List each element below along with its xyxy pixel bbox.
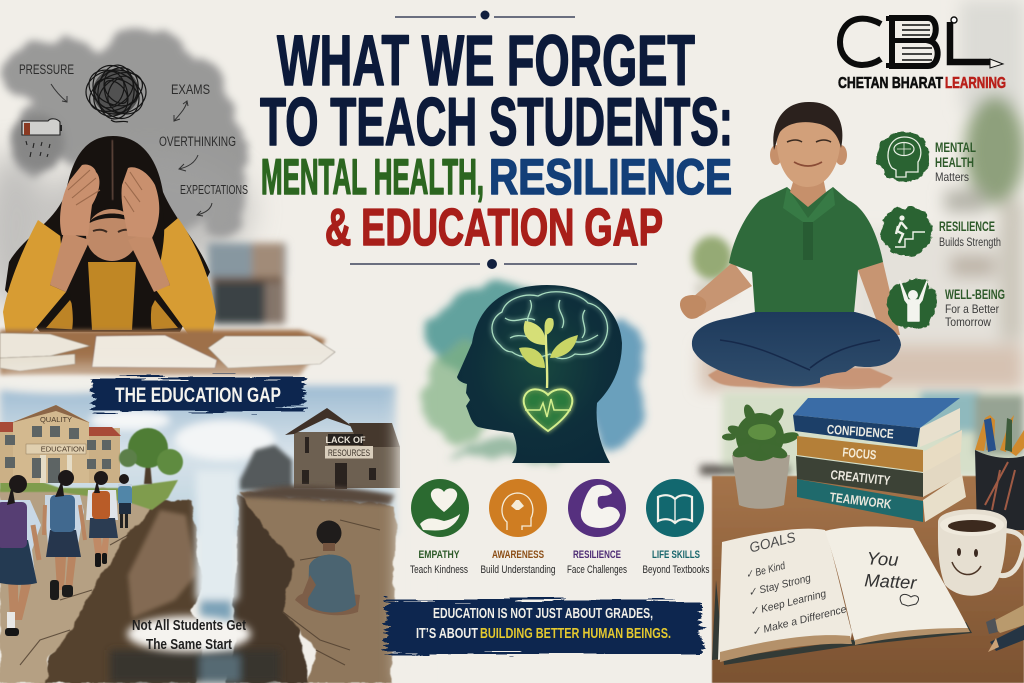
book stack xyxy=(793,398,966,522)
banner: the education gap: THE EDUCATION GAP xyxy=(115,384,281,407)
notebook goals list: GOALS xyxy=(748,528,798,556)
boy xyxy=(680,102,901,389)
book: teamwork xyxy=(797,474,966,522)
skill: awareness xyxy=(480,479,556,576)
brain outline xyxy=(492,292,608,359)
soft edge on paper xyxy=(0,368,418,683)
shirt xyxy=(729,187,883,313)
skill: empathy: EMPATHY xyxy=(418,549,460,561)
desk top xyxy=(712,476,1024,683)
icon: resilience xyxy=(882,206,932,256)
book: confidence: CONFIDENCE xyxy=(826,422,895,441)
notebook goals list: ✓ Be Kind xyxy=(745,560,787,581)
student 2 xyxy=(44,470,85,600)
text: well-being xyxy=(945,287,1005,329)
top divider xyxy=(395,10,575,20)
ground cracks xyxy=(20,520,380,665)
notebook you matter note xyxy=(864,548,919,593)
banner highlight: BUILDING BETTER HUMAN BEINGS. xyxy=(480,625,671,642)
sweater upper arms xyxy=(3,220,66,335)
banner: the education gap xyxy=(92,378,304,411)
panel: growing mind xyxy=(422,285,645,463)
caption: not all students: Not All Students Get xyxy=(132,617,246,634)
panel: desk scene xyxy=(700,392,1024,683)
smiley mug xyxy=(938,509,1024,596)
student 4 xyxy=(118,474,132,528)
room background xyxy=(700,0,1024,390)
student 1 xyxy=(0,475,41,636)
students walking to school xyxy=(0,470,132,636)
title: & EDUCATION GAP xyxy=(325,199,663,257)
scribble icon xyxy=(81,57,151,127)
book: creativity xyxy=(796,452,961,497)
watercolor wash xyxy=(422,285,645,462)
caption: not all students xyxy=(127,616,251,653)
icon: well-being xyxy=(887,278,937,328)
text: resilience builds strength: RESILIENCE xyxy=(939,219,995,234)
sign: resources xyxy=(325,446,373,459)
skill: awareness: AWARENESS xyxy=(492,549,544,561)
text: mental health matters xyxy=(935,139,976,184)
banner line 2: IT’S ABOUT xyxy=(416,625,478,642)
jeans xyxy=(692,312,901,386)
book: teamwork: TEAMWORK xyxy=(829,489,893,512)
ruined house xyxy=(240,408,400,505)
skill: awareness: Build Understanding xyxy=(480,564,556,576)
notebook goals list xyxy=(730,521,848,638)
pens xyxy=(986,605,1024,652)
tree xyxy=(119,428,183,484)
bookshelf behind student xyxy=(208,243,286,324)
arms xyxy=(692,262,752,316)
book: confidence xyxy=(793,398,960,447)
row: life skill icons xyxy=(410,479,710,576)
table xyxy=(0,330,326,375)
text: mental health matters: HEALTH xyxy=(935,154,974,170)
chasm water and mist xyxy=(110,470,280,683)
forearms skin xyxy=(50,232,90,292)
notebook goals list: ✓ Make a Difference xyxy=(751,603,848,638)
lower title divider xyxy=(350,259,637,269)
icon: mental health xyxy=(877,131,929,183)
skill: resilience: Face Challenges xyxy=(567,564,627,576)
logo mark xyxy=(840,16,1003,68)
left ground xyxy=(0,490,165,683)
head silhouette xyxy=(457,285,622,463)
open books on table xyxy=(0,333,335,371)
label: pressure: PRESSURE xyxy=(19,62,74,77)
panel: stress cloud and student xyxy=(0,27,335,375)
label: expectations: EXPECTATIONS xyxy=(180,182,248,197)
text: resilience builds strength xyxy=(939,219,1001,249)
title: RESILIENCE xyxy=(489,149,732,205)
skill: resilience: RESILIENCE xyxy=(573,549,621,561)
good school xyxy=(0,405,121,483)
text: mental health matters: MENTAL xyxy=(935,139,976,155)
grass xyxy=(0,478,178,510)
skill: empathy: Teach Kindness xyxy=(410,564,468,576)
book: focus: FOCUS xyxy=(842,445,877,462)
skill: life skills: LIFE SKILLS xyxy=(652,549,700,561)
hair front strands xyxy=(60,200,164,330)
arrows xyxy=(51,84,212,216)
panel: meditating boy room xyxy=(680,0,1024,390)
text: mental health matters: Matters xyxy=(935,170,969,184)
face xyxy=(86,209,138,261)
notebook you matter note: You xyxy=(866,548,899,570)
notebook goals list: ✓ Stay Strong xyxy=(747,572,812,599)
blurred window xyxy=(700,392,1024,477)
logo: CBL xyxy=(838,16,1006,92)
good school: QUALITY xyxy=(40,415,72,424)
left cliff xyxy=(40,500,205,683)
student with head in hands xyxy=(3,136,216,342)
title: WHAT WE FORGET xyxy=(277,22,695,101)
skill: life skills: Beyond Textbooks xyxy=(642,564,710,576)
heart pulse xyxy=(524,389,572,431)
right ground xyxy=(240,492,396,683)
skill: life skills xyxy=(642,479,710,576)
open notebook xyxy=(712,521,972,665)
low battery cloud icon xyxy=(12,114,64,170)
torso xyxy=(72,262,148,330)
pencil cup xyxy=(975,415,1024,530)
right cliff xyxy=(225,495,310,683)
text: well-being: Tomorrow xyxy=(945,315,991,329)
notebook goals list: ✓ Keep Learning xyxy=(749,588,828,618)
student 3 xyxy=(86,471,118,567)
caption: not all students: The Same Start xyxy=(146,636,232,653)
sky xyxy=(0,377,398,535)
skill: resilience xyxy=(567,479,627,576)
skill: empathy xyxy=(410,479,469,576)
logo wordmark: CHETAN BHARAT xyxy=(838,75,943,92)
label: exams: EXAMS xyxy=(171,82,210,97)
text: well-being: For a Better xyxy=(945,302,999,316)
sign: lack of: LACK OF xyxy=(326,435,366,445)
neck and head xyxy=(790,172,826,207)
title xyxy=(260,22,733,257)
hands xyxy=(60,164,99,236)
title: TO TEACH STUDENTS: xyxy=(260,84,733,160)
text: resilience builds strength: Builds Strength xyxy=(939,235,1001,249)
book: focus xyxy=(797,430,962,473)
sitting child xyxy=(295,520,360,615)
grey thought cloud xyxy=(2,27,248,237)
potted plant xyxy=(722,403,800,509)
sign: resources: RESOURCES xyxy=(328,448,370,459)
banner: education message xyxy=(386,600,702,654)
panel: the education gap scene xyxy=(0,368,418,683)
sprout xyxy=(519,318,578,388)
notebook you matter note: Matter xyxy=(864,570,918,593)
book: creativity: CREATIVITY xyxy=(830,467,891,488)
hair back xyxy=(5,136,210,332)
good school: EDUCATION xyxy=(41,444,84,454)
banner line 1: EDUCATION IS NOT JUST ABOUT GRADES, xyxy=(433,605,653,622)
title: MENTAL HEALTH, xyxy=(261,149,484,205)
label: overthinking: OVERTHINKING xyxy=(159,134,236,149)
